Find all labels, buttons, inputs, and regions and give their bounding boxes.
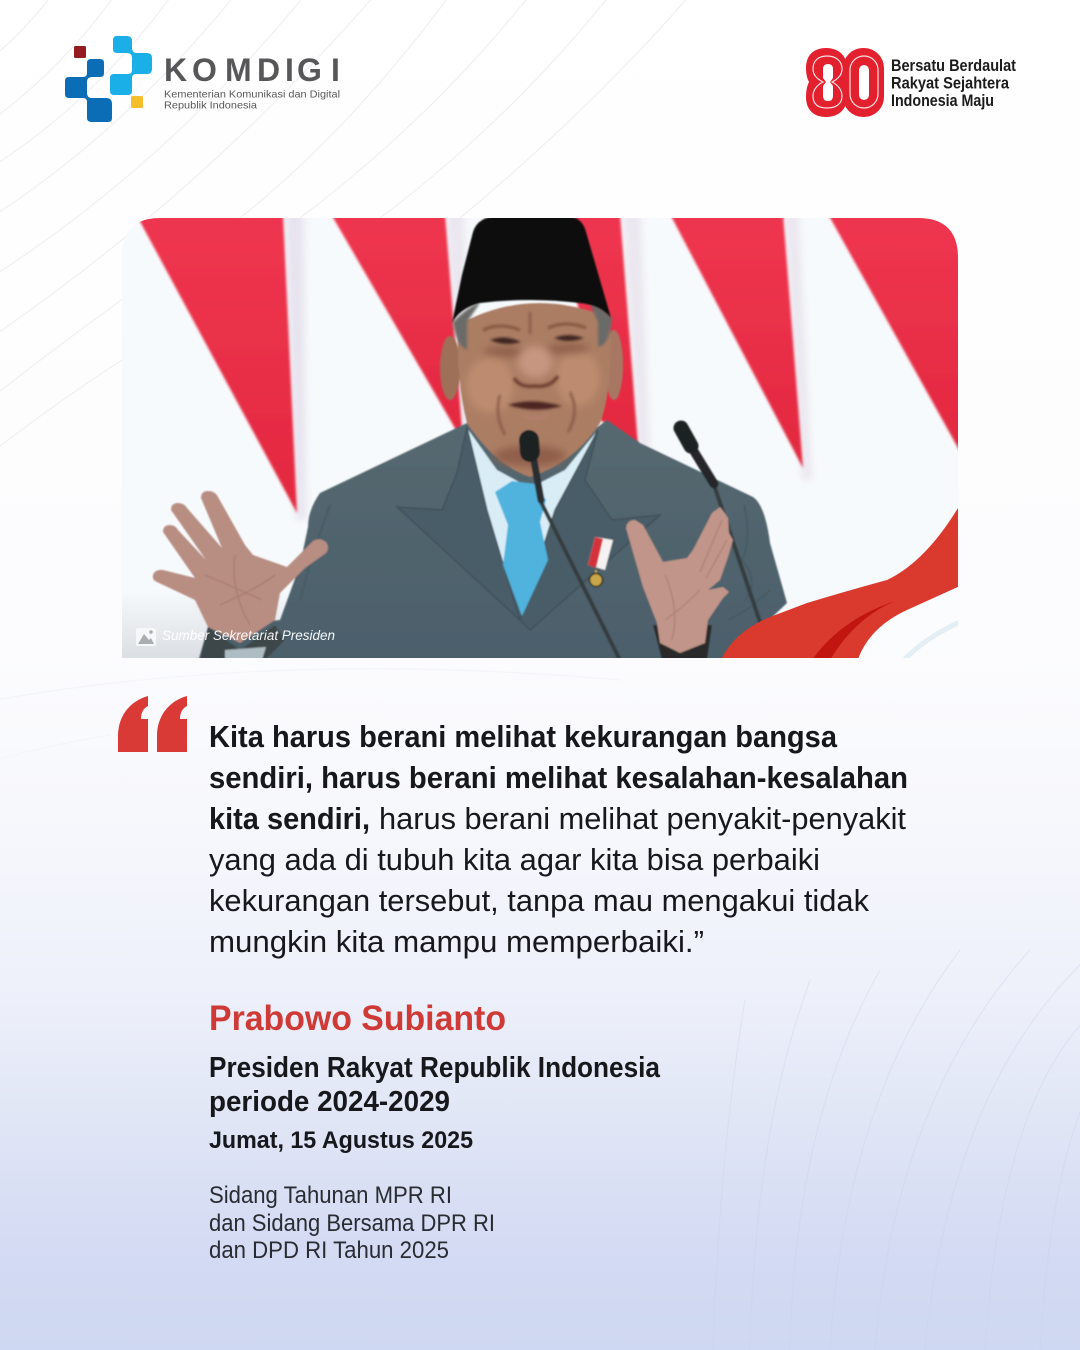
flag backdrop <box>122 200 962 658</box>
speaker name: Prabowo Subianto <box>209 999 506 1038</box>
wordmark: KOMDIGI <box>164 52 340 88</box>
lapel pin <box>588 537 613 586</box>
tagline: Bersatu Berdaulat <box>891 56 1016 75</box>
icon: quotation mark <box>118 696 187 752</box>
hat <box>452 216 611 323</box>
logo: KOMDIGI <box>65 36 340 122</box>
icon: image <box>136 628 156 646</box>
speaker title: Presiden Rakyat Republik Indonesia <box>209 1052 661 1084</box>
eyes and brow <box>483 312 586 435</box>
tie <box>495 481 548 616</box>
ministry name: Kementerian Komunikasi dan Digital <box>164 88 340 100</box>
quote text: sendiri, harus berani melihat kesalahan-kesalahan <box>209 760 908 795</box>
caption shade <box>122 610 282 658</box>
event description: Sidang Tahunan MPR RI <box>209 1182 452 1209</box>
quote text: Kita harus berani melihat kekurangan bangsa <box>209 719 838 754</box>
lapels <box>397 427 520 620</box>
quote text: kita sendiri, <box>209 801 370 836</box>
tagline: Rakyat Sejahtera <box>891 74 1009 92</box>
date: Jumat, 15 Agustus 2025 <box>209 1127 473 1154</box>
speaker title: periode 2024-2029 <box>209 1086 450 1118</box>
shirt <box>468 430 596 563</box>
face shading <box>466 344 600 466</box>
suit folds <box>322 506 747 560</box>
red wave accent <box>720 508 960 662</box>
tagline <box>891 56 1016 110</box>
quote text <box>209 719 908 959</box>
quote text: mungkin kita mampu memperbaiki.” <box>209 924 704 959</box>
event description: dan Sidang Bersama DPR RI <box>209 1210 495 1237</box>
hair <box>453 303 612 350</box>
microphones <box>529 428 762 660</box>
tagline: Indonesia Maju <box>891 91 994 110</box>
ministry name: Republik Indonesia <box>164 100 257 112</box>
ministry name <box>164 88 340 112</box>
left hand <box>153 491 328 643</box>
logo: 80 tahun <box>806 48 1016 117</box>
right hand <box>626 507 733 653</box>
right wrist <box>653 625 712 660</box>
speaker title <box>209 1052 661 1118</box>
photo panel: president speaking <box>122 200 962 662</box>
suit <box>198 420 787 662</box>
quote text: harus berani melihat penyakit-penyakit <box>379 801 906 836</box>
face <box>458 303 611 477</box>
photo credit: Sumber Sekretariat Presiden <box>162 628 335 643</box>
mouth <box>508 401 562 410</box>
icon: 80 emblem <box>806 48 884 117</box>
event description: dan DPD RI Tahun 2025 <box>209 1237 449 1264</box>
event description <box>209 1182 495 1264</box>
quote text: kekurangan tersebut, tanpa mau mengakui tidak <box>209 883 869 918</box>
left cuff <box>200 625 285 660</box>
icon: KOMDIGI mark <box>65 36 152 122</box>
ears <box>440 336 460 400</box>
speaker <box>153 216 787 662</box>
quote text: yang ada di tubuh kita agar kita bisa perbaiki <box>209 842 820 877</box>
